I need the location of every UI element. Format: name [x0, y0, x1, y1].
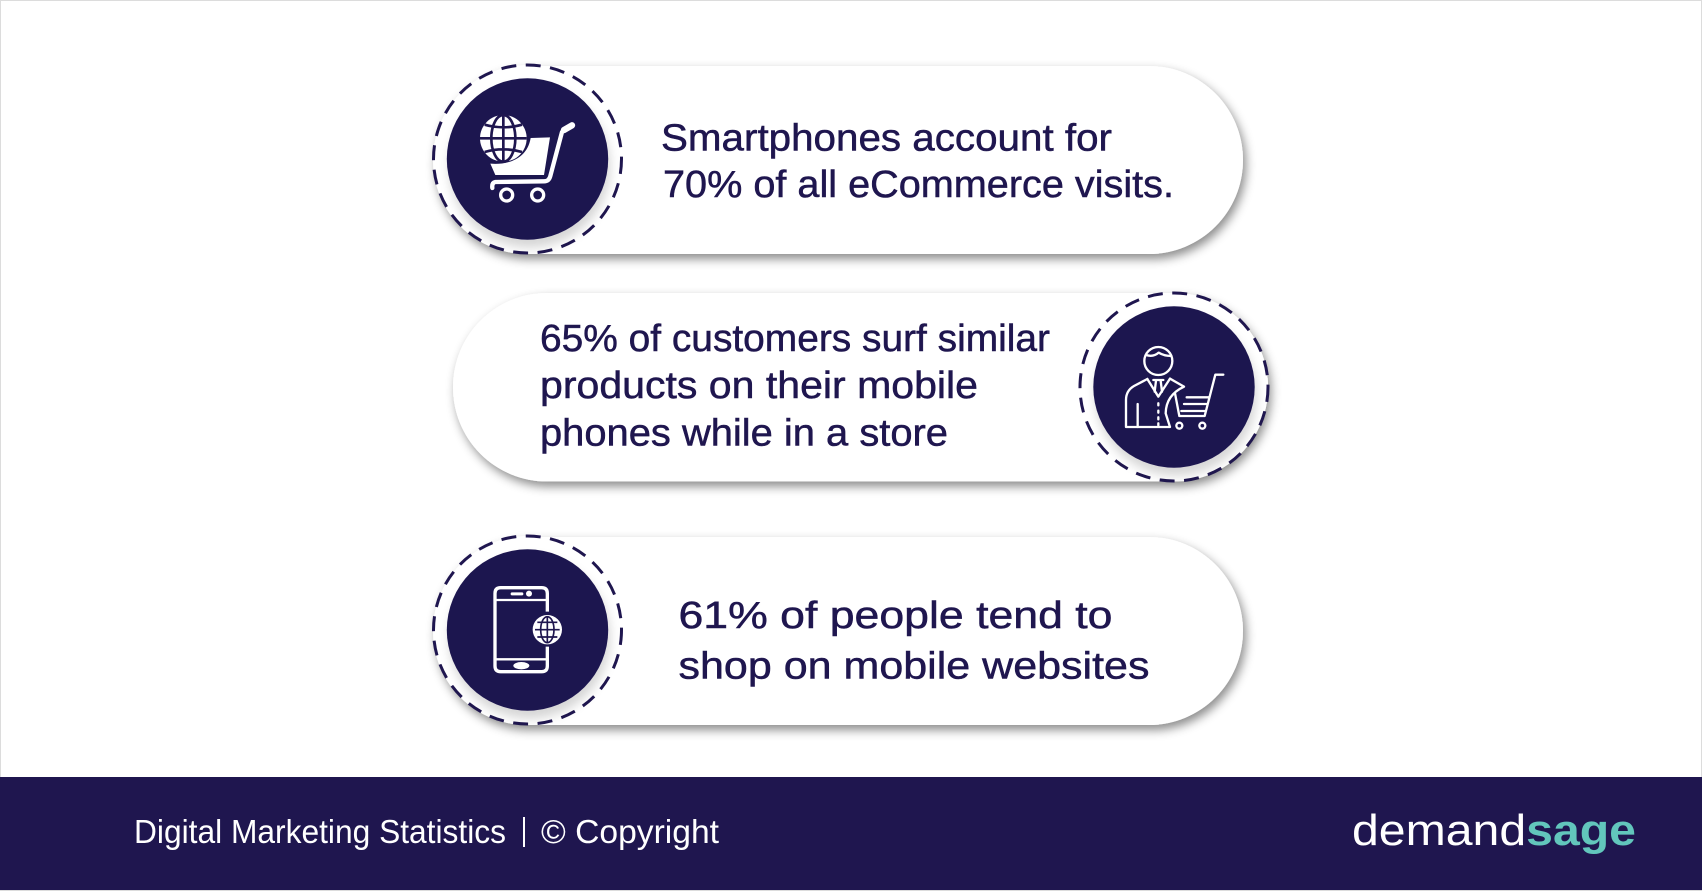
stat text 2	[540, 318, 1050, 454]
footer caption: © Copyright	[541, 813, 719, 850]
pill card 3	[433, 537, 1243, 725]
dashed ring 1	[434, 65, 622, 253]
dashed ring 3	[434, 536, 622, 724]
dashed ring 2	[1080, 293, 1268, 481]
footer band	[0, 777, 1702, 890]
panel: in-store browsing stat	[453, 293, 1268, 482]
pill card 1	[433, 66, 1243, 254]
stat text 3: 61% of people tend to	[678, 595, 1112, 637]
icon: phone with globe	[495, 588, 562, 672]
icon badge 2	[1093, 306, 1255, 468]
stat text 2: phones while in a store	[540, 412, 948, 454]
icon badge 3	[447, 549, 608, 711]
stat text 1: Smartphones account for	[661, 118, 1112, 160]
pill card 2	[453, 293, 1268, 482]
stat text 1	[661, 118, 1174, 206]
icon badge 1	[447, 78, 608, 240]
footer caption: Digital Marketing Statistics	[134, 813, 506, 850]
icon: shopper with cart	[1126, 347, 1223, 429]
footer caption	[134, 813, 719, 850]
stat text 2: 65% of customers surf similar	[540, 318, 1050, 360]
stat text 3: shop on mobile websites	[678, 646, 1150, 688]
icon: globe and shopping cart	[480, 115, 572, 201]
panel: mobile websites stat	[433, 536, 1243, 725]
logo: demandsage: demand sage	[1352, 806, 1636, 855]
stat text 3	[678, 595, 1150, 688]
stat text 2: products on their mobile	[540, 365, 978, 407]
stat text 1: 70% of all eCommerce visits.	[663, 164, 1174, 206]
panel: smartphones stat	[433, 65, 1243, 254]
